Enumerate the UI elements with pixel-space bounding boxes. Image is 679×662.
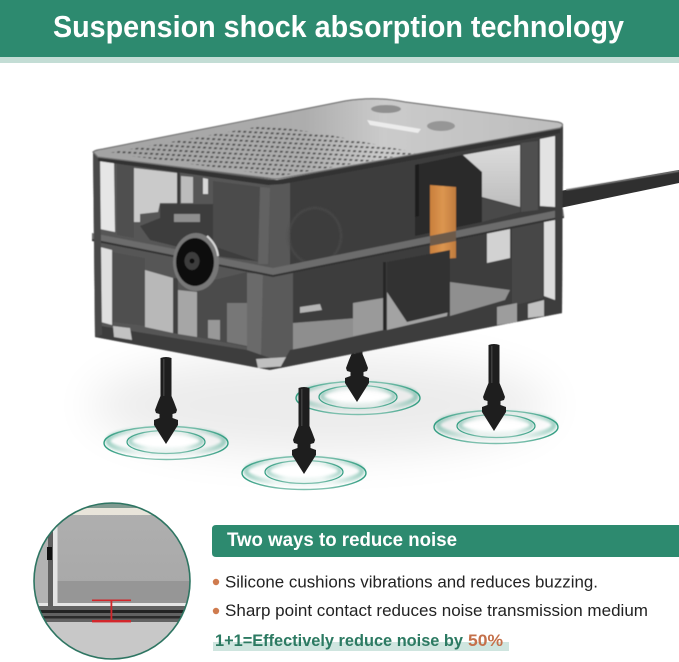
bullet: sharp point contact: Sharp point contact reduces noise transmission medium [225,602,648,620]
perforated vent grid [108,125,418,176]
highlighted conclusion: 1+1=Effectively reduce noise by [215,632,464,650]
right face upper detail [289,208,341,264]
power cable [560,170,679,208]
vibration rings and spike: front left foot [104,357,228,460]
circular detail inset [30,500,195,662]
vibration rings and spike: front centre foot [242,387,366,490]
bullet: silicone cushions: Silicone cushions vibrations and reduces buzzing. [225,574,598,592]
mid seam [92,209,564,275]
left face upper windows [100,161,290,270]
red gap measurement marker [92,600,131,622]
left face [93,152,277,370]
left face lower windows [95,247,293,370]
top face [93,99,563,179]
title: Suspension shock absorption technology [53,9,625,44]
outer edges [93,152,102,337]
rim shadow under lid [98,128,560,185]
highlighted conclusion: 50% [468,632,503,650]
top face engraved logo [367,105,455,133]
header banner [0,0,679,63]
right face lower detail [280,220,562,368]
sub-heading banner [212,525,679,557]
translucent adapter housing [92,99,564,370]
DC jack socket [173,233,219,291]
floor shadow [90,355,550,455]
sub-heading text: Two ways to reduce noise [227,529,457,551]
vibration rings and spike: right foot [434,344,558,444]
right face [270,125,563,370]
vibration rings and spike: rear centre foot [296,315,420,414]
orange transformer [430,185,456,260]
